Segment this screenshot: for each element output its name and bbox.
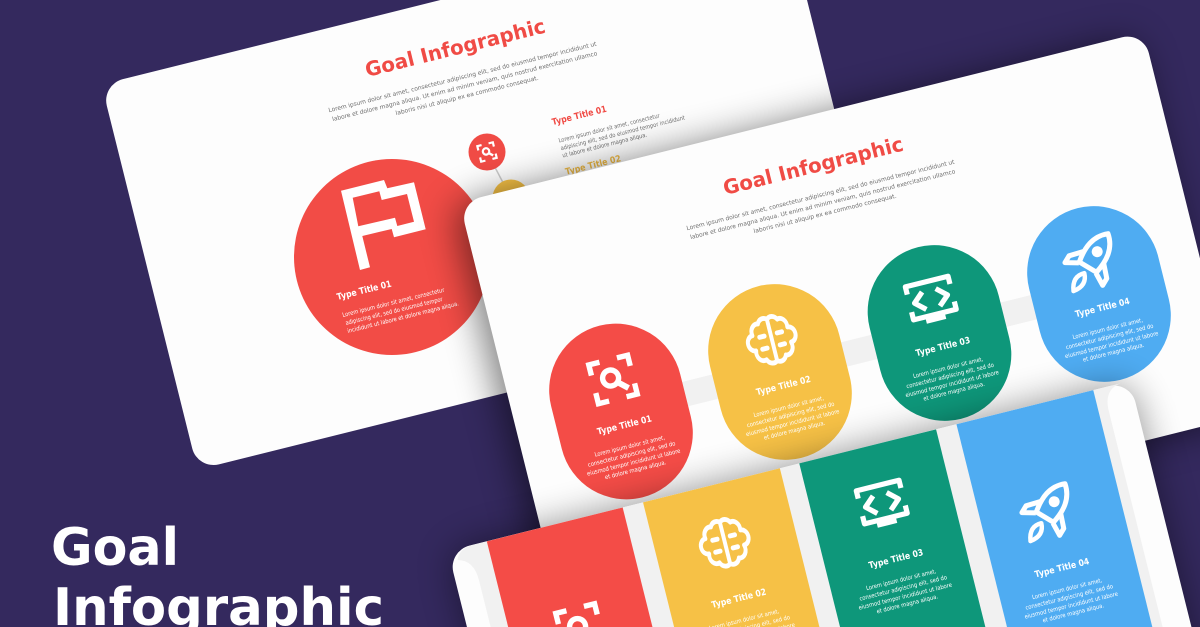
intro text: Lorem ipsum dolor sit amet, consectetur adipiscing elit, sed do eiusmod tempor incididunt ut bbox=[328, 41, 598, 114]
small circle: red search bbox=[468, 134, 506, 170]
oval 03 bbox=[854, 231, 1025, 435]
green column content: Type Title 03 bbox=[868, 548, 925, 571]
oval 01: consectetur adipiscing elit, sed do bbox=[587, 440, 677, 469]
blue column content: Type Title 04 bbox=[1034, 557, 1091, 580]
heading bbox=[51, 518, 384, 627]
green column content: eiusmod tempor incididunt ut labore bbox=[858, 582, 953, 612]
type title 01 text: ut labore et dolore magna aliqua. bbox=[562, 132, 648, 159]
oval 04: consectetur adipiscing elit, sed do bbox=[1065, 323, 1155, 351]
circle text bbox=[336, 265, 460, 335]
oval 01: Type Title 01 bbox=[596, 414, 653, 438]
oval 04: et dolore magna aliqua. bbox=[1082, 342, 1145, 364]
icon: flag bbox=[341, 180, 426, 270]
green column content bbox=[831, 474, 955, 619]
column: green bbox=[799, 429, 1032, 627]
slide title: Goal Infographic bbox=[720, 132, 906, 200]
slide title: Goal Infographic bbox=[362, 14, 548, 82]
oval 02: Lorem ipsum dolor sit amet, bbox=[753, 395, 825, 419]
heading: Goal bbox=[51, 518, 179, 578]
blue column content: consectetur adipiscing elit, sed do bbox=[1025, 583, 1114, 612]
oval 04 bbox=[1013, 192, 1185, 396]
type title 01 text: Lorem ipsum dolor sit amet, consectetur bbox=[558, 112, 661, 144]
oval 04: Type Title 04 bbox=[1074, 297, 1131, 320]
oval 02: et dolore magna aliqua. bbox=[763, 420, 826, 442]
oval 01: et dolore magna aliqua. bbox=[604, 459, 667, 481]
oval 02: consectetur adipiscing elit, sed do bbox=[746, 401, 836, 429]
intro text: labore et dolore magna aliqua. Ut enim ad minim veniam, quis nostrud exercitation ullamco bbox=[690, 168, 956, 241]
yellow column content: Type Title 02 bbox=[711, 588, 767, 611]
connecting band bbox=[618, 279, 1101, 422]
green column content: et dolore magna aliqua. bbox=[876, 593, 939, 615]
small circle: yellow bbox=[492, 180, 530, 216]
panel: front slide bbox=[448, 381, 1200, 627]
column: blue bbox=[956, 390, 1189, 627]
blue column content bbox=[992, 463, 1121, 627]
type title 01 text bbox=[551, 87, 688, 160]
oval 01: Lorem ipsum dolor sit amet, bbox=[594, 434, 666, 459]
big red circle bbox=[294, 159, 490, 355]
yellow column content bbox=[673, 509, 796, 627]
connector line bbox=[487, 152, 511, 198]
column: red bbox=[487, 507, 719, 627]
blue column content: Lorem ipsum dolor sit amet, bbox=[1031, 577, 1103, 601]
type title 01 text: adipiscing elit, sed do eiusmod tempor incididunt bbox=[560, 114, 686, 152]
type title 02 text: Type Title 02 bbox=[564, 154, 622, 178]
oval 02: eiusmod tempor incididunt ut labore bbox=[745, 408, 840, 438]
column: yellow bbox=[643, 468, 876, 627]
circle text: incididunt ut labore et dolore magna aliqua. bbox=[347, 300, 460, 335]
green column content: Lorem ipsum dolor sit amet, bbox=[865, 568, 937, 592]
circle text: Type Title 01 bbox=[336, 280, 393, 303]
panel: back slide bbox=[102, 0, 882, 470]
oval 01: eiusmod tempor incididunt ut labore bbox=[586, 448, 681, 478]
red column content bbox=[556, 604, 604, 627]
type title 01 text: Type Title 01 bbox=[551, 105, 608, 128]
oval 03: consectetur adipiscing elit, sed do bbox=[906, 362, 995, 390]
intro text: Lorem ipsum dolor sit amet, consectetur adipiscing elit, sed do eiusmod tempor incididunt ut bbox=[686, 159, 956, 232]
oval 02 bbox=[694, 270, 866, 474]
grey backing bbox=[455, 383, 1200, 627]
oval 04: Lorem ipsum dolor sit amet, bbox=[1072, 317, 1144, 341]
oval 04: eiusmod tempor incididunt ut labore bbox=[1064, 330, 1159, 360]
blue column content: eiusmod tempor incididunt ut labore bbox=[1024, 591, 1119, 621]
oval 03: Lorem ipsum dolor sit amet, bbox=[912, 356, 984, 380]
green column content: consectetur adipiscing elit, sed do bbox=[859, 574, 948, 603]
intro text: laboris nisi ut aliquip ex ea commodo consequat. bbox=[395, 75, 539, 117]
circle text: adipiscing elit, sed do eiusmod tempor bbox=[345, 296, 444, 327]
oval 03: Type Title 03 bbox=[915, 336, 972, 359]
oval 03: et dolore magna aliqua. bbox=[923, 381, 986, 403]
oval 03: eiusmod tempor incididunt ut labore bbox=[905, 369, 1000, 399]
circle text: Lorem ipsum dolor sit amet, consectetur bbox=[342, 287, 446, 319]
oval 02: Type Title 02 bbox=[755, 375, 812, 398]
oval 01 bbox=[535, 310, 707, 513]
blue column content: et dolore magna aliqua. bbox=[1042, 602, 1105, 624]
intro text: laboris nisi ut aliquip ex ea commodo consequat. bbox=[753, 193, 897, 235]
intro text: labore et dolore magna aliqua. Ut enim ad minim veniam, quis nostrud exercitation ullamco bbox=[332, 50, 598, 123]
panel: middle slide bbox=[460, 32, 1200, 588]
